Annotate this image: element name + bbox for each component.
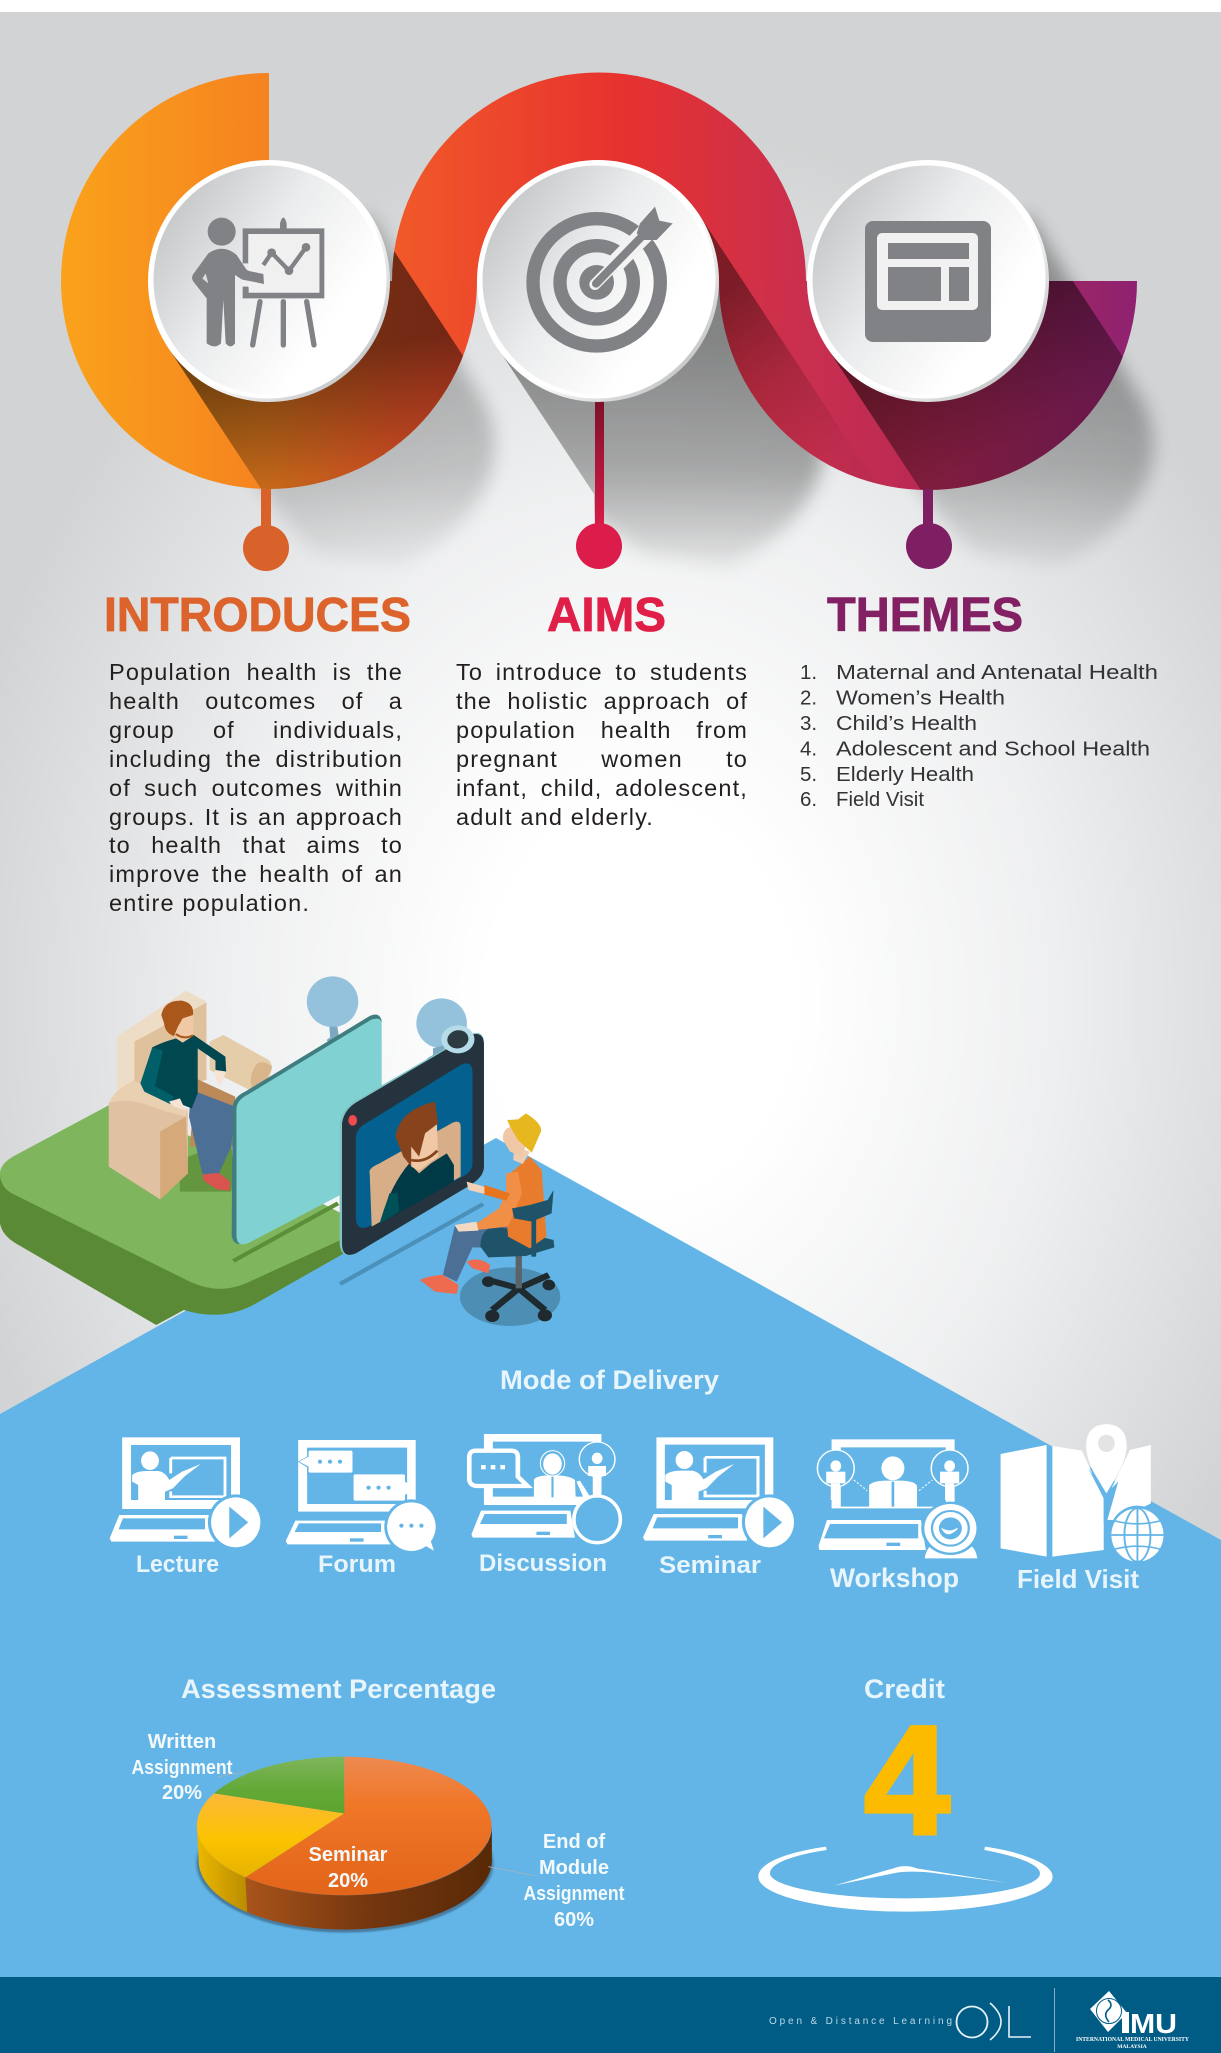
themes list: 6.	[800, 788, 817, 811]
themes list: Child’s Health	[836, 712, 977, 735]
blue delivery panel	[0, 1138, 1221, 1980]
text block: introduces paragraph: of such outcomes within	[109, 775, 403, 801]
slice: seminar 20%	[197, 1793, 344, 1877]
text block: aims paragraph: infant, child, adolescent,	[456, 775, 748, 801]
chair base	[486, 1275, 552, 1319]
IMU logo	[1076, 1991, 1190, 2050]
pie label: end of module assignment: Module	[539, 1857, 609, 1879]
heading: themes: THEMES	[827, 589, 1023, 642]
pie label: written assignment: 20%	[162, 1782, 202, 1804]
ribbon shadows	[168, 214, 1123, 490]
armchair back	[117, 991, 272, 1147]
pie label: written assignment: Assignment	[132, 1757, 233, 1779]
footer bar	[0, 1977, 1221, 2053]
icon: seminar	[643, 1437, 797, 1550]
disc shadows on background	[168, 214, 1154, 567]
pie side	[197, 1826, 492, 1930]
slice: end of module assignment 60%	[245, 1757, 492, 1895]
pie label: seminar	[309, 1844, 388, 1892]
text block: aims paragraph: the holistic approach of	[456, 688, 748, 714]
pie label: seminar: Seminar	[309, 1844, 388, 1866]
text block: introduces paragraph	[109, 659, 403, 916]
themes list	[800, 661, 1158, 811]
footer: open and distance learning	[769, 2003, 1031, 2040]
label: workshop: Workshop	[830, 1563, 959, 1593]
ribbon: orange segment	[61, 73, 477, 489]
label: field visit: Field Visit	[1017, 1564, 1139, 1594]
IMU logo: MALAYSIA	[1117, 2044, 1147, 2050]
floor line under monitor	[340, 1204, 483, 1284]
themes list: 5.	[800, 763, 817, 786]
text block: introduces paragraph: including the distribution	[109, 746, 403, 772]
heading: introduces: INTRODUCES	[104, 589, 411, 642]
heading: aims: AIMS	[547, 589, 666, 642]
text block: introduces paragraph: group of individuals,	[109, 717, 403, 743]
icon: web page layout	[865, 221, 991, 342]
themes list: 1.	[800, 661, 817, 684]
icon: field visit map	[1001, 1424, 1166, 1564]
credit value: 4	[864, 1694, 950, 1868]
themes list: Women’s Health	[836, 686, 1005, 710]
label: forum: Forum	[318, 1551, 396, 1578]
green platform	[0, 1100, 348, 1325]
ODL logo	[956, 2003, 1031, 2040]
themes list: 3.	[800, 712, 817, 735]
pie label: end of module assignment: End of	[543, 1831, 605, 1853]
pie chart: assessment percentage	[196, 1757, 536, 1933]
IMU logo: INTERNATIONAL MEDICAL UNIVERSITY	[1076, 2037, 1190, 2043]
pie label: written assignment	[132, 1731, 233, 1804]
disc: themes	[807, 160, 1049, 402]
icon: discussion	[469, 1434, 620, 1543]
text block: aims paragraph: adult and elderly.	[456, 804, 654, 830]
label: discussion: Discussion	[479, 1550, 607, 1577]
text block: introduces paragraph: Population health is the	[109, 659, 403, 685]
stem and dot: aims	[576, 400, 622, 569]
heading: credit: Credit	[864, 1674, 945, 1704]
video feed person	[369, 1102, 461, 1227]
text block: introduces paragraph: health outcomes of a	[109, 688, 403, 714]
footer: open and distance learning: Open & Distance Learning	[769, 2016, 952, 2027]
panel: ribbon timeline	[61, 72, 1137, 490]
label: lecture: Lecture	[136, 1551, 219, 1578]
text block: introduces paragraph: to health that aims to	[109, 832, 403, 858]
icon: target with arrow	[533, 207, 673, 346]
text block: introduces paragraph: groups. It is an approach	[109, 804, 403, 830]
pie label: written assignment: Written	[148, 1731, 216, 1753]
pie label: seminar: 20%	[328, 1870, 368, 1892]
icon: forum	[286, 1440, 439, 1554]
disc: aims	[477, 160, 719, 402]
pie label: end of module assignment: 60%	[554, 1909, 594, 1931]
ribbon: red segment	[392, 72, 806, 281]
text block: aims paragraph: population health from	[456, 717, 748, 743]
pie label: end of module assignment	[524, 1831, 625, 1931]
themes list: Maternal and Antenatal Health	[836, 661, 1158, 684]
ribbon: purple segment	[719, 281, 1137, 490]
text block: introduces paragraph: entire population.	[109, 890, 310, 916]
text block: aims paragraph: pregnant women to	[456, 746, 748, 772]
pie label: end of module assignment: Assignment	[524, 1883, 625, 1905]
student on office chair	[420, 1113, 560, 1326]
stem and dot: introduces	[243, 489, 289, 571]
themes list: 4.	[800, 738, 817, 760]
icon: workshop	[817, 1439, 980, 1558]
webcam balloon behind teal screen	[307, 976, 358, 1046]
seated student	[189, 1092, 235, 1191]
icon: presenter with chart	[192, 217, 324, 346]
teal screen	[232, 1015, 382, 1244]
slice: written assignment 20%	[214, 1757, 344, 1813]
themes list: 2.	[800, 686, 817, 710]
IMU logo: MU	[1130, 2008, 1177, 2039]
themes list: Elderly Health	[836, 763, 974, 786]
stem and dot: themes	[906, 489, 952, 569]
icon: lecture	[110, 1437, 264, 1550]
disc: introduces	[148, 160, 390, 402]
footer divider	[1054, 1988, 1055, 2052]
monitor with webcam	[340, 998, 484, 1255]
themes list: Field Visit	[836, 788, 924, 811]
label: seminar: Seminar	[659, 1552, 761, 1579]
heading: mode of delivery: Mode of Delivery	[500, 1365, 719, 1395]
text block: introduces paragraph: improve the health of an	[109, 861, 403, 887]
credit pedestal ring	[758, 1847, 1053, 1912]
illustration: video consultation	[0, 976, 560, 1326]
themes list: Adolescent and School Health	[836, 738, 1150, 760]
text block: aims paragraph	[456, 659, 748, 830]
armchair front arm	[109, 1081, 188, 1199]
heading: assessment percentage: Assessment Percentage	[181, 1674, 496, 1704]
seated student torso	[140, 1001, 226, 1111]
text block: aims paragraph: To introduce to students	[456, 659, 748, 685]
